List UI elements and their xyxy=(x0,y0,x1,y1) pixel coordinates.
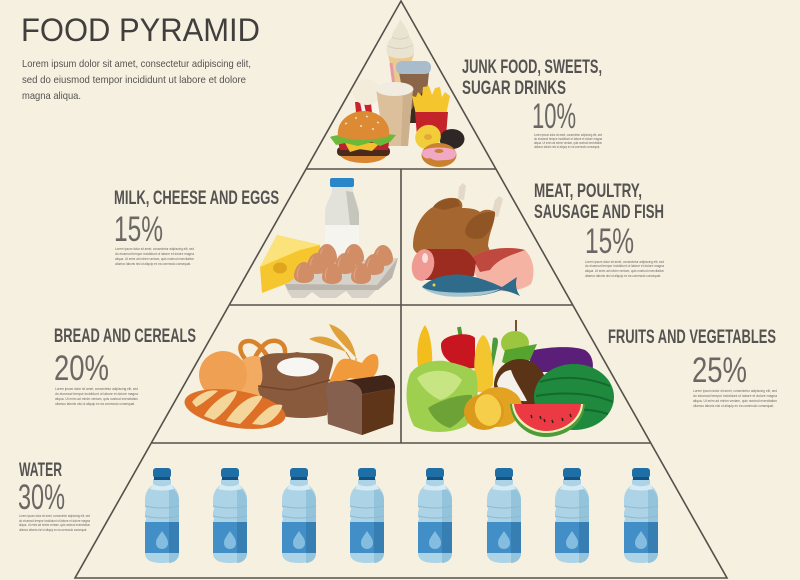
label: fruits and vegetables: do eiusmod tempor incididunt ut labore et dolore magna xyxy=(693,394,777,398)
cheese xyxy=(260,235,322,293)
burger xyxy=(330,111,396,163)
flour sack xyxy=(258,352,333,418)
label: fruits and vegetables: ullamco laboris nisi ut aliquip ex ea commodo consequat. xyxy=(693,404,774,408)
label: junk food: SUGAR DRINKS xyxy=(462,77,566,99)
label: bread: Lorem ipsum dolor sit amet, consectetur adipiscing elit, sed xyxy=(55,387,138,391)
croissant xyxy=(328,354,378,384)
label: bread: aliqua. Ut enim ad minim veniam, quis nostrud exercitation xyxy=(55,397,138,401)
label: bread: 20% xyxy=(54,349,109,388)
chicken xyxy=(413,183,503,258)
cabbage xyxy=(407,361,478,432)
label: milk cheese eggs: aliqua. Ut enim ad minim veniam, quis nostrud exercitation xyxy=(115,257,194,261)
fish xyxy=(422,274,520,297)
label: meat: do eiusmod tempor incididunt ut labore et dolore magna xyxy=(585,264,664,268)
label: meat: Lorem ipsum dolor sit amet, consectetur adipiscing elit, sed xyxy=(585,260,664,264)
popcorn xyxy=(353,79,381,125)
coffee cup xyxy=(396,61,431,123)
ice cream xyxy=(386,19,414,84)
banana xyxy=(417,325,432,366)
label: fruits and vegetables: 25% xyxy=(692,351,747,390)
egg tray xyxy=(285,258,398,298)
intro text: magna aliqua. xyxy=(22,90,81,102)
label: meat: MEAT, POULTRY, xyxy=(534,180,642,202)
label: meat: ullamco laboris nisi ut aliquip ex ea commodo consequat. xyxy=(585,274,661,278)
label: water: aliqua. Ut enim ad minim veniam, quis nostrud exercitation xyxy=(19,523,90,527)
label: water: do eiusmod tempor incididunt ut labore et dolore magna xyxy=(19,519,90,523)
label: water: ullamco laboris nisi ut aliquip ex ea commodo consequat. xyxy=(19,528,87,532)
intro text: Lorem ipsum dolor sit amet, consectetur adipiscing elit, xyxy=(22,58,251,70)
label: milk cheese eggs: Lorem ipsum dolor sit amet, consectetur adipiscing elit, sed xyxy=(115,247,194,251)
corn xyxy=(474,335,493,392)
label: junk food: JUNK FOOD, SWEETS, xyxy=(462,56,602,78)
label: junk food: aliqua. Ut enim ad minim veniam, quis nostrud exercitation xyxy=(534,141,602,145)
soft drink xyxy=(376,63,414,146)
illustration: junk food xyxy=(330,19,464,167)
label: junk food: do eiusmod tempor incididunt ut labore et dolore magna xyxy=(534,137,602,141)
label: fruits and vegetables: aliqua. Ut enim ad minim veniam, quis nostrud exercitation xyxy=(693,399,777,403)
title: FOOD PYRAMID xyxy=(21,12,260,48)
label: junk food: ullamco laboris nisi ut aliquip ex ea commodo consequat. xyxy=(534,145,600,149)
potato xyxy=(464,387,522,430)
label: water: WATER xyxy=(19,459,62,481)
grapes and leaves xyxy=(490,320,537,385)
label: fruits and vegetables: Lorem ipsum dolor sit amet, consectetur adipiscing elit, sed xyxy=(693,389,777,393)
label: meat xyxy=(534,180,664,278)
eggs xyxy=(294,244,393,284)
label: water: Lorem ipsum dolor sit amet, consectetur adipiscing elit, sed xyxy=(19,514,90,518)
rye loaf xyxy=(325,375,395,435)
label: junk food: 10% xyxy=(532,97,576,136)
ham xyxy=(472,248,533,291)
baguette xyxy=(182,383,288,435)
label: milk cheese eggs: MILK, CHEESE AND EGGS xyxy=(114,187,279,209)
fries xyxy=(412,86,450,136)
label: junk food xyxy=(462,56,602,149)
illustration: milk cheese eggs xyxy=(260,178,398,298)
label: milk cheese eggs xyxy=(114,187,279,266)
label: bread: ullamco laboris nisi ut aliquip ex ea commodo consequat. xyxy=(55,402,135,406)
eggplant xyxy=(530,347,593,372)
wheat xyxy=(309,324,356,368)
intro text xyxy=(22,58,251,102)
illustration: bread xyxy=(182,324,395,435)
label: water: 30% xyxy=(18,478,65,517)
label: bread xyxy=(54,325,196,406)
watermelon xyxy=(534,364,614,430)
label: junk food: Lorem ipsum dolor sit amet, consectetur adipiscing elit, sed xyxy=(534,133,602,137)
label: milk cheese eggs: do eiusmod tempor incididunt ut labore et dolore magna xyxy=(115,252,194,256)
buns xyxy=(199,351,274,402)
label: bread: BREAD AND CEREALS xyxy=(54,325,196,347)
illustration: meat xyxy=(409,183,533,297)
illustration: water bottles xyxy=(145,468,658,563)
illustration: fruits and vegetables xyxy=(407,320,614,437)
label: meat: SAUSAGE AND FISH xyxy=(534,201,664,223)
intro text: sed do eiusmod tempor incididunt ut labore et dolore xyxy=(22,74,246,86)
label: meat: 15% xyxy=(585,222,634,261)
sausage xyxy=(409,247,476,283)
label: milk cheese eggs: 15% xyxy=(114,210,163,249)
coconut xyxy=(494,359,546,411)
label: bread: do eiusmod tempor incididunt ut labore et dolore magna xyxy=(55,392,138,396)
label: meat: aliqua. Ut enim ad minim veniam, quis nostrud exercitation xyxy=(585,269,664,273)
pepper xyxy=(441,327,475,368)
label: water xyxy=(18,459,90,532)
milk bottle xyxy=(325,178,359,255)
donuts xyxy=(411,121,464,167)
watermelon slice xyxy=(510,404,585,437)
pretzel xyxy=(240,341,285,366)
label: milk cheese eggs: ullamco laboris nisi ut aliquip ex ea commodo consequat. xyxy=(115,262,191,266)
label: fruits and vegetables xyxy=(608,326,777,408)
